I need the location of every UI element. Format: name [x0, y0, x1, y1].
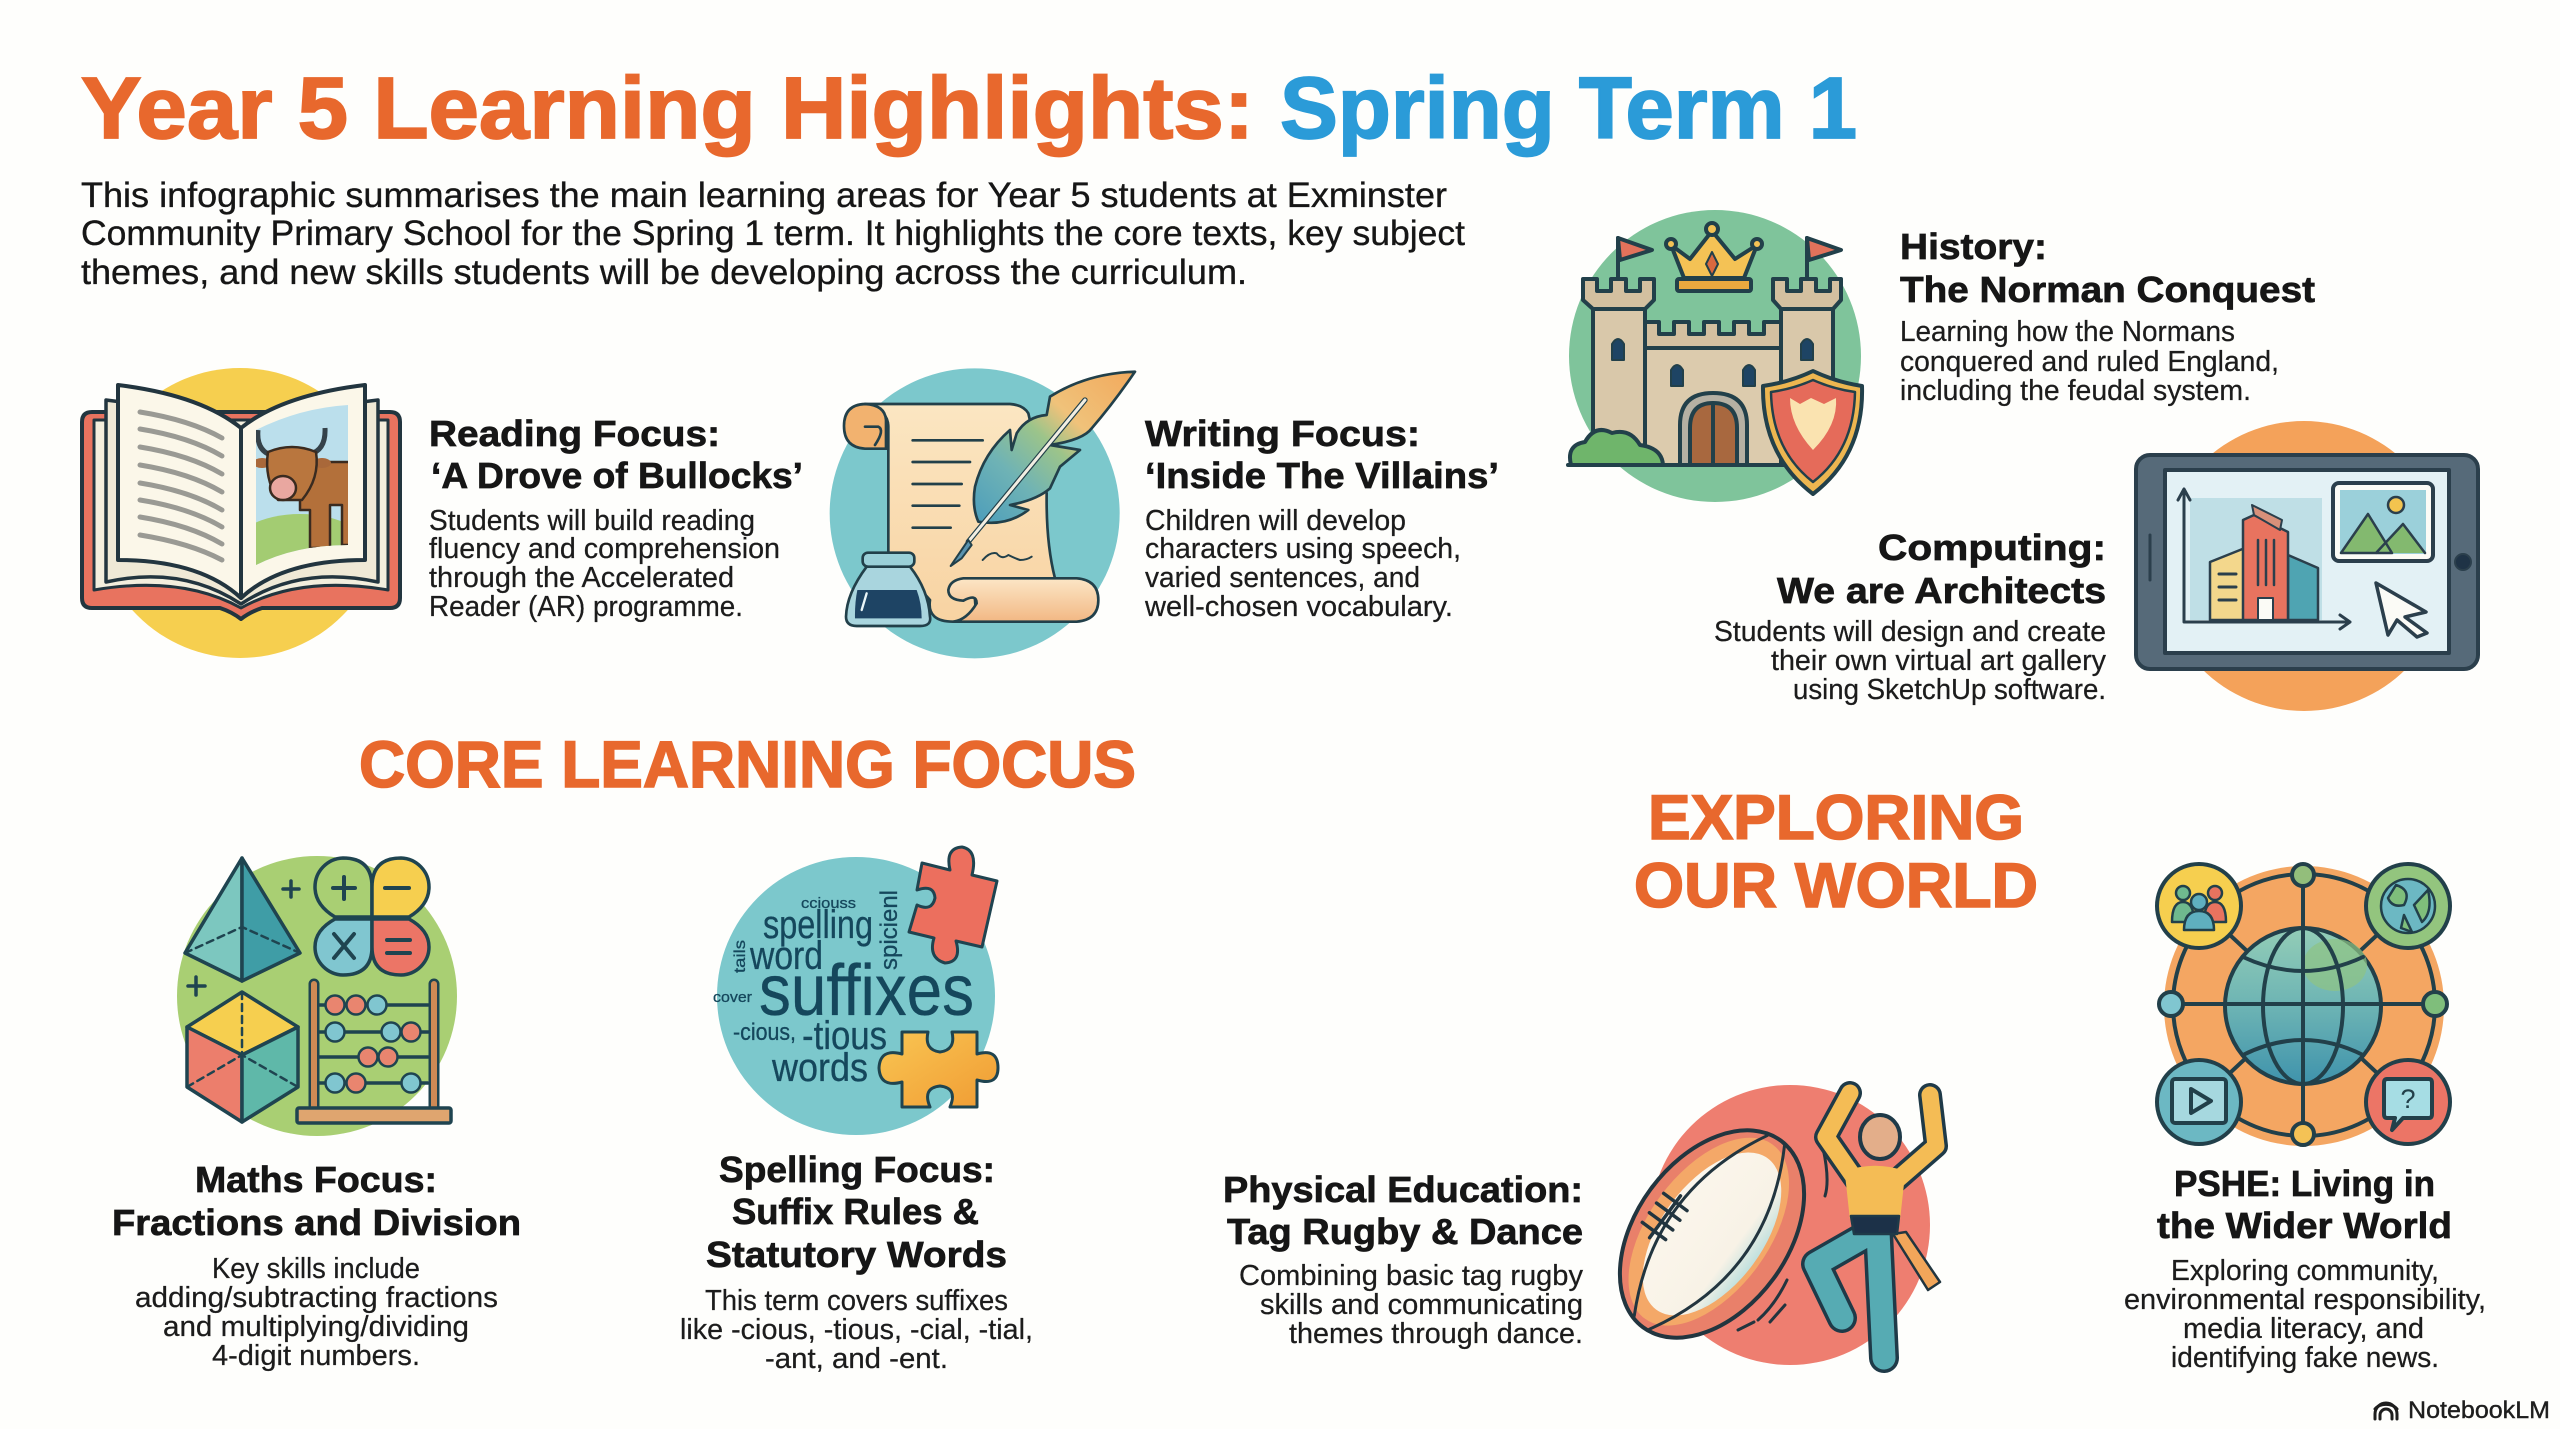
heading: maths focus: Fractions and Division: [112, 1202, 521, 1243]
word cloud: suffixes: [759, 951, 974, 1031]
heading: physical education: Physical Education:: [1223, 1169, 1583, 1210]
word cloud: cciouss: [801, 895, 856, 912]
text: writing description: varied sentences, and: [1145, 562, 1420, 594]
icon: maths shapes and abacus: [177, 856, 457, 1136]
icon: tablet with building design: [2136, 421, 2478, 711]
panel: pshe: [2124, 864, 2486, 1374]
text: computing description: Students will design and create: [1714, 616, 2106, 648]
heading: history: The Norman Conquest: [1900, 269, 2315, 310]
text: computing description: [1714, 616, 2107, 706]
heading: writing focus: ‘Inside The Villains’: [1145, 455, 1499, 496]
intro text: [81, 176, 1465, 292]
panel: physical education: [1223, 1085, 1940, 1372]
heading: reading focus: Reading Focus:: [429, 413, 720, 454]
text: writing description: characters using speech,: [1145, 533, 1461, 565]
icon: globe network: ?: [2400, 1084, 2416, 1114]
word cloud: spicienl: [876, 890, 903, 970]
panel: history: [1568, 210, 2315, 502]
icon: rugby ball and dancer: [1582, 1085, 1940, 1372]
title: Spring Term 1: [1280, 60, 1857, 157]
word cloud: spelling: [763, 903, 873, 947]
text: history description: Learning how the Normans: [1900, 316, 2235, 348]
heading: computing: We are Architects: [1777, 570, 2106, 611]
heading: physical education: [1223, 1169, 1583, 1252]
icon: notebooklm arcs: [2375, 1403, 2397, 1419]
icon: castle, crown and shield: [1568, 210, 1862, 502]
intro text: themes, and new skills students will be developing across the curriculum.: [81, 253, 1247, 292]
icon: globe network: [2157, 864, 2450, 1146]
text: maths description: Key skills include: [212, 1253, 420, 1285]
panel: spelling focus: [680, 847, 1033, 1375]
title: [81, 60, 1857, 157]
text: history description: including the feudal system.: [1900, 375, 2251, 407]
heading: spelling focus: Statutory Words: [706, 1234, 1007, 1275]
word cloud: tails: [732, 940, 749, 973]
text: writing description: [1144, 505, 1461, 623]
heading: spelling focus: Spelling Focus:: [719, 1149, 995, 1190]
heading: spelling focus: [706, 1149, 1007, 1275]
panel: maths focus: [112, 856, 521, 1372]
notebooklm logo: NotebookLM: [2408, 1397, 2550, 1424]
text: spelling description: like -cious, -tious, -cial, -tial,: [680, 1314, 1033, 1346]
text: physical education description: [1239, 1260, 1584, 1350]
heading: spelling focus: Suffix Rules &: [732, 1191, 979, 1232]
text: reading description: Reader (AR) programme.: [429, 591, 743, 623]
text: maths description: 4-digit numbers.: [212, 1340, 420, 1372]
text: computing description: their own virtual art gallery: [1771, 645, 2107, 677]
heading: writing focus: Writing Focus:: [1145, 413, 1420, 454]
text: physical education description: skills and communicating: [1260, 1289, 1583, 1321]
text: history description: conquered and ruled England,: [1900, 346, 2279, 378]
word cloud: -cious,: [733, 1019, 796, 1046]
text: pshe description: media literacy, and: [2183, 1313, 2424, 1345]
word cloud: words: [771, 1046, 868, 1090]
heading: history: [1900, 226, 2315, 310]
section heading: exploring our world: EXPLORING: [1648, 783, 2024, 853]
intro text: This infographic summarises the main learning areas for Year 5 students at Exminster: [81, 176, 1447, 215]
text: maths description: and multiplying/dividing: [163, 1311, 469, 1343]
text: pshe description: identifying fake news.: [2171, 1342, 2439, 1374]
text: writing description: Children will develop: [1145, 505, 1406, 537]
heading: pshe: PSHE: Living in: [2174, 1163, 2435, 1204]
word cloud: cover: [713, 989, 752, 1006]
text: reading description: Students will build reading: [429, 505, 755, 537]
intro text: Community Primary School for the Spring 1 term. It highlights the core texts, key subject: [81, 214, 1465, 253]
text: physical education description: Combining basic tag rugby: [1239, 1260, 1584, 1292]
text: pshe description: environmental responsibility,: [2124, 1284, 2486, 1316]
heading: computing: Computing:: [1878, 527, 2106, 568]
word cloud: word: [749, 934, 823, 978]
heading: maths focus: [112, 1159, 521, 1243]
heading: pshe: the Wider World: [2157, 1205, 2452, 1246]
panel: computing: [1714, 421, 2478, 711]
heading: pshe: [2157, 1163, 2452, 1246]
text: maths description: [135, 1253, 498, 1372]
panel: reading focus: [82, 368, 803, 658]
icon: open book with bullock: [82, 368, 400, 658]
text: physical education description: themes through dance.: [1289, 1318, 1583, 1350]
text: maths description: adding/subtracting fractions: [135, 1282, 498, 1314]
text: spelling description: -ant, and -ent.: [765, 1343, 948, 1375]
text: pshe description: [2124, 1255, 2486, 1374]
heading: reading focus: [429, 413, 803, 496]
word cloud: [713, 890, 974, 1090]
panel: writing focus: [830, 368, 1499, 658]
icon: suffix word cloud and puzzle pieces: [713, 847, 998, 1135]
text: spelling description: [680, 1285, 1033, 1375]
heading: writing focus: [1145, 413, 1499, 496]
text: history description: [1900, 316, 2279, 407]
text: reading description: [429, 505, 780, 623]
heading: reading focus: ‘A Drove of Bullocks’: [431, 455, 803, 496]
title: Year 5 Learning Highlights:: [81, 60, 1254, 157]
heading: physical education: Tag Rugby & Dance: [1227, 1211, 1583, 1252]
text: reading description: fluency and comprehension: [429, 533, 780, 565]
text: writing description: well-chosen vocabulary.: [1144, 591, 1453, 623]
section heading: exploring our world: [1634, 783, 2038, 921]
text: pshe description: Exploring community,: [2171, 1255, 2439, 1287]
heading: history: History:: [1900, 226, 2047, 267]
text: reading description: through the Accelerated: [429, 562, 734, 594]
text: spelling description: This term covers suffixes: [705, 1285, 1008, 1317]
heading: maths focus: Maths Focus:: [195, 1159, 437, 1200]
word cloud: -tious: [802, 1014, 887, 1058]
text: computing description: using SketchUp software.: [1793, 674, 2106, 706]
heading: computing: [1777, 527, 2106, 611]
section heading: exploring our world: OUR WORLD: [1634, 851, 2038, 921]
section heading: core learning focus: CORE LEARNING FOCUS: [359, 727, 1136, 801]
icon: scroll, quill and ink: [830, 368, 1135, 658]
